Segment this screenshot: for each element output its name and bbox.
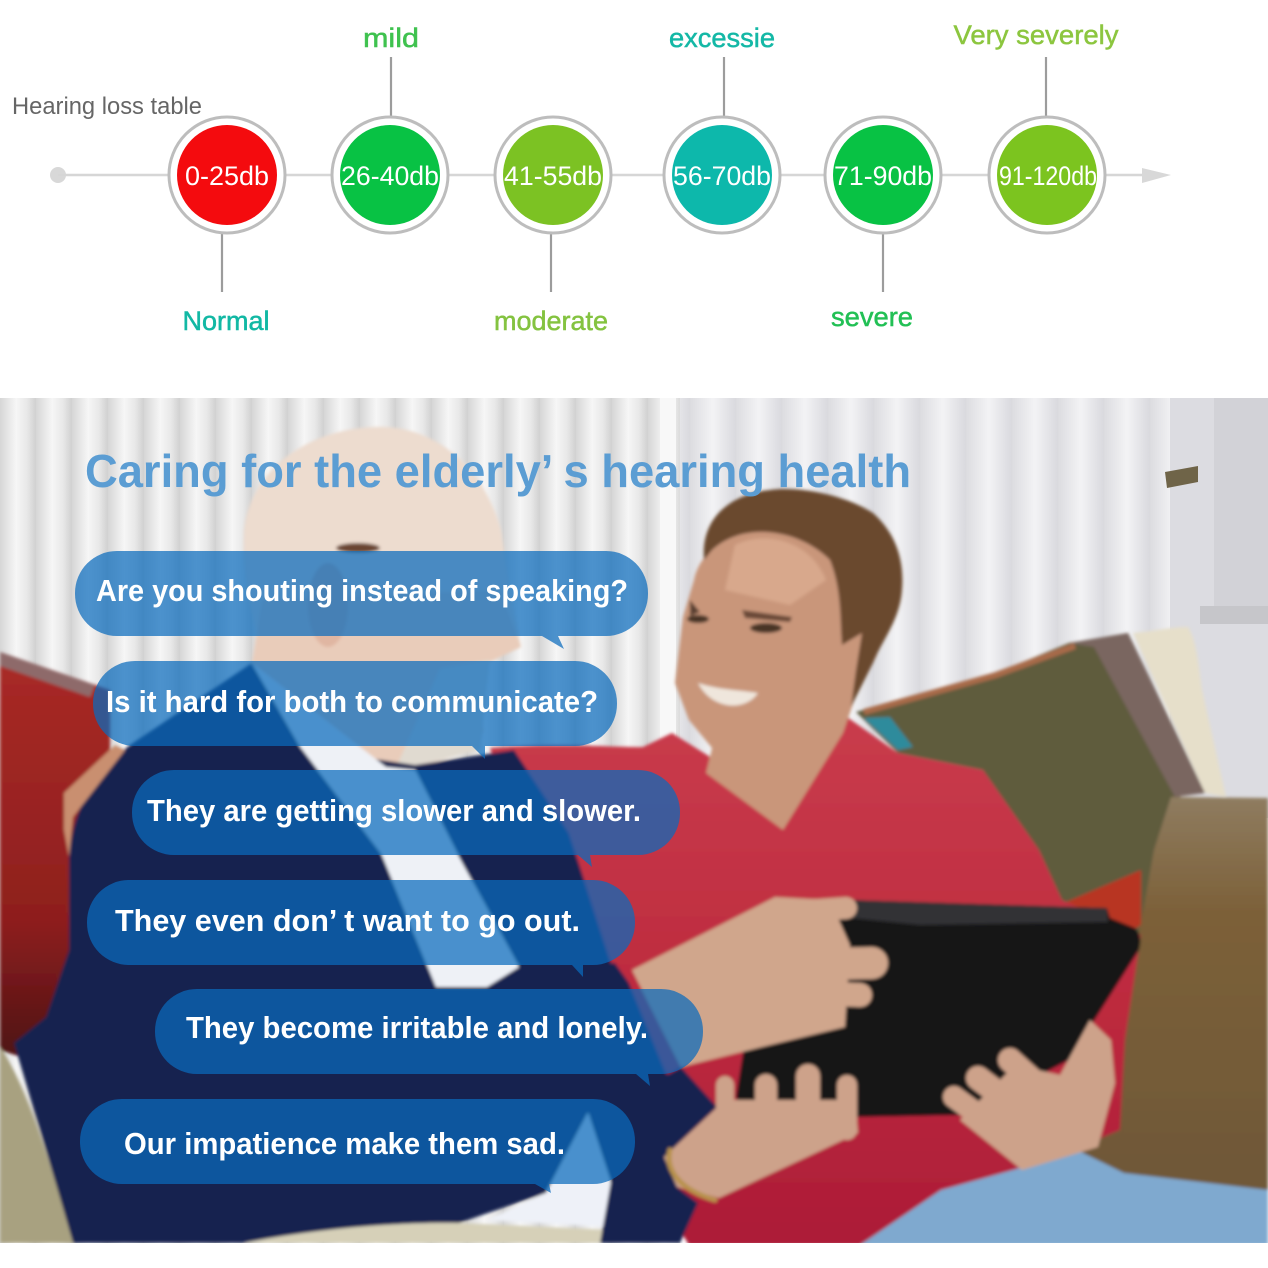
hands holding tablet: [664, 1020, 1115, 1200]
younger man: torso in red polo: [490, 717, 1268, 1245]
tablet: [736, 900, 1140, 1117]
timeline axis with arrow: [50, 167, 1171, 183]
label: moderate: moderate: [494, 306, 608, 336]
node: 56-70db: [664, 117, 780, 233]
node: 71-90db: 71-90db: [834, 161, 932, 191]
older man's hand on younger man's shoulder: [64, 745, 125, 857]
speech bubble: shouting: Are you shouting instead of speaking?: [96, 573, 628, 608]
speech bubble: shouting: [75, 551, 648, 649]
speech bubble: irritable: [155, 989, 703, 1086]
speech bubble: slower: [132, 770, 680, 867]
label: Very severely: Very severely: [954, 20, 1119, 50]
node: 41-55db: 41-55db: [504, 161, 602, 191]
younger man: head and hair: [675, 489, 902, 830]
speech bubble: go out: They even don’ t want to go out.: [115, 903, 580, 938]
speech bubble: irritable: They become irritable and lonely.: [186, 1010, 648, 1045]
sofa and cushions: [0, 627, 1268, 1243]
node: 0-25db: [169, 117, 285, 233]
node: 56-70db: 56-70db: [673, 161, 771, 191]
speech bubble: communicate: Is it hard for both to communicate?: [106, 684, 598, 719]
speech bubble: impatience: Our impatience make them sad.: [124, 1126, 565, 1161]
node: 71-90db: [825, 117, 941, 233]
panel: photo of two men on a sofa: [0, 398, 1268, 1245]
speech bubble: slower: They are getting slower and slower.: [147, 793, 641, 828]
wall and window blinds: [0, 398, 1268, 1243]
heading: hearing loss table: Hearing loss table: [12, 93, 202, 120]
label: Normal: Normal: [182, 306, 270, 336]
speech bubble: impatience: [80, 1099, 635, 1193]
older man: cardigan and shirt: [0, 663, 716, 1243]
node: 91-120db: [989, 117, 1105, 233]
node: 41-55db: [495, 117, 611, 233]
older man's sleeve cuff: [600, 1067, 717, 1243]
title: Caring for the elderly’ s hearing health: [85, 445, 911, 497]
speech bubble: communicate: [93, 661, 617, 759]
younger man's forearm and hand: [632, 897, 872, 1067]
panel: hearing loss timeline: [12, 20, 1171, 336]
speech bubble: go out: [87, 880, 635, 977]
label: severe: severe: [831, 302, 913, 332]
label: excessie: excessie: [669, 23, 775, 53]
node: 0-25db: 0-25db: [185, 161, 269, 191]
node: 26-40db: 26-40db: [341, 161, 439, 191]
connector lines: [222, 57, 1046, 292]
label: mild: mild: [363, 23, 419, 53]
older man: head: [244, 427, 521, 770]
jeans: [860, 1150, 1268, 1245]
node: 26-40db: [332, 117, 448, 233]
node: 91-120db: 91-120db: [999, 161, 1097, 191]
